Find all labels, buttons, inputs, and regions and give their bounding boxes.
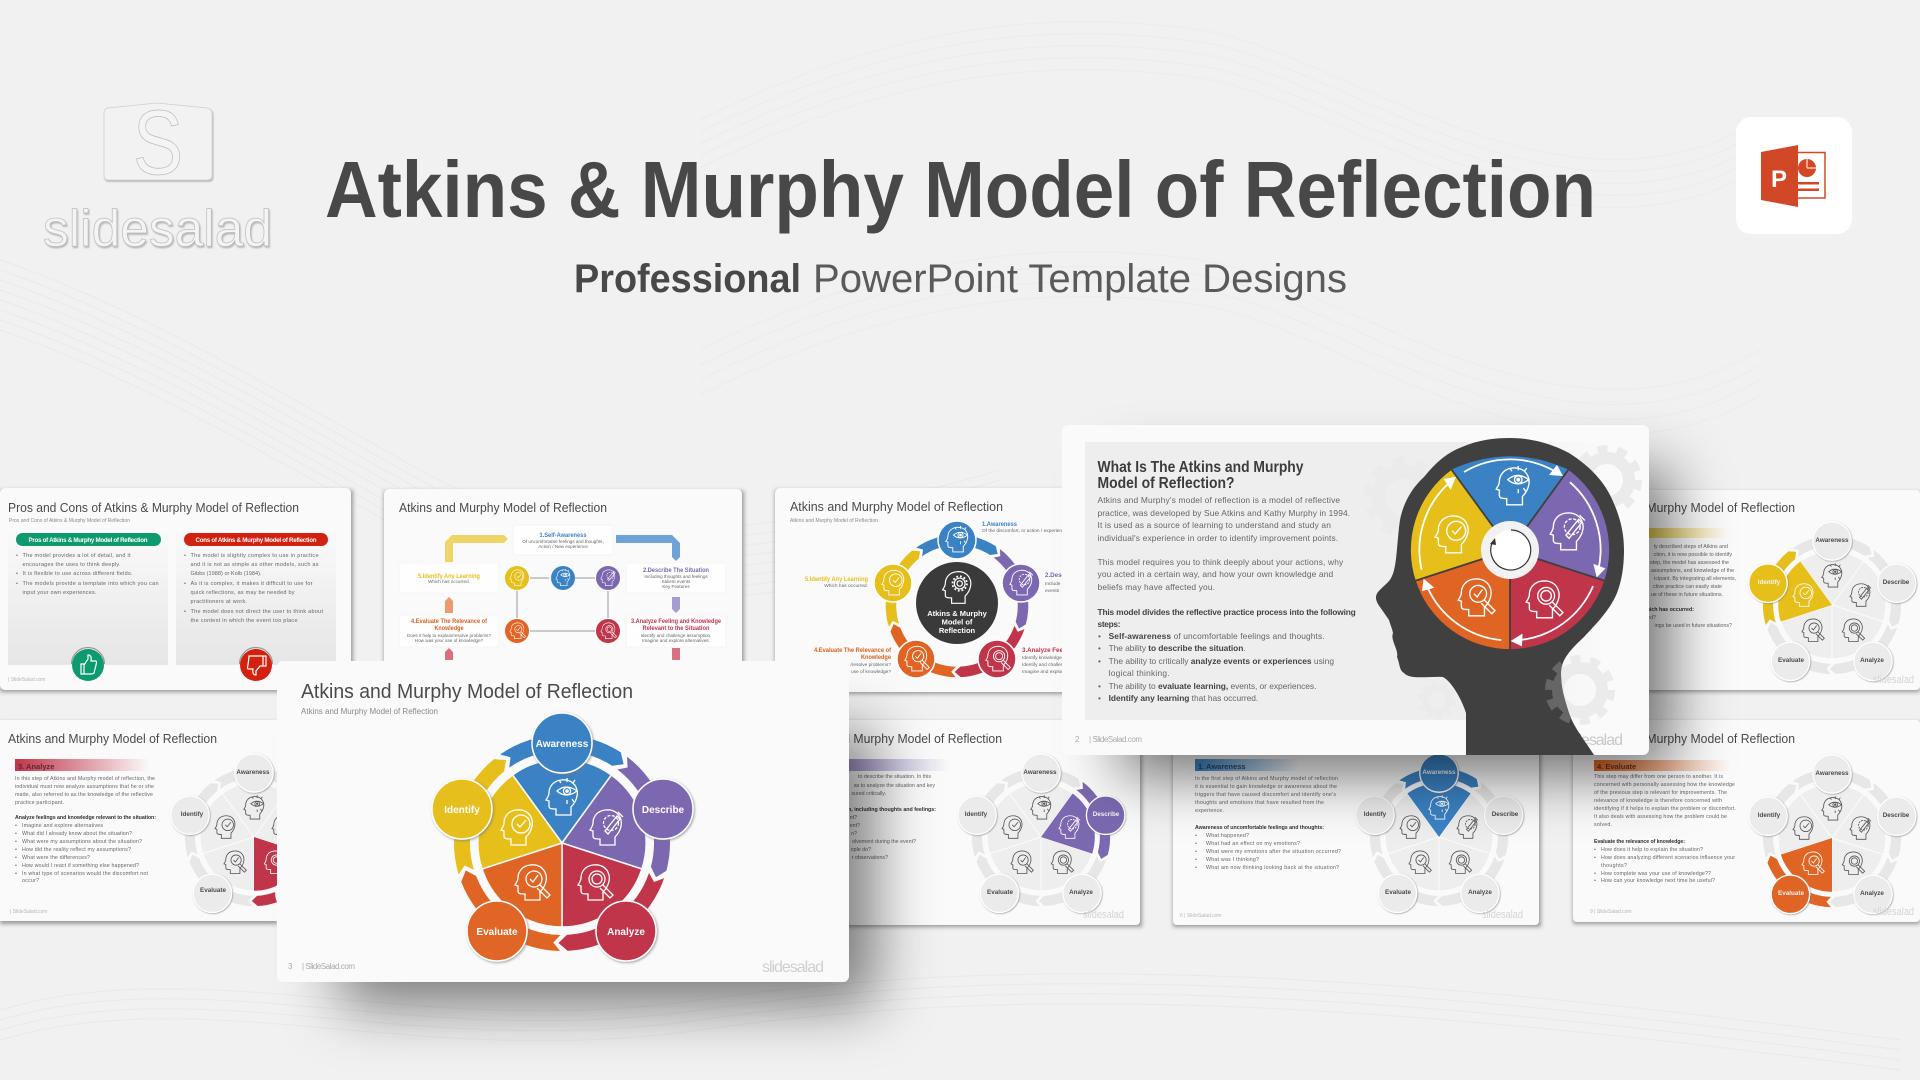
hub xyxy=(1481,521,1539,579)
step text: • xyxy=(1195,833,1197,839)
step text: What were the differences? xyxy=(22,855,90,861)
cons list: quick reflections, as may be needed by xyxy=(190,590,295,596)
step text: ed? xyxy=(1647,615,1656,621)
panel: cons xyxy=(176,528,336,681)
node: describe: Describe xyxy=(642,805,685,816)
intro paragraphs xyxy=(1098,495,1350,592)
node: identify: Identify xyxy=(444,805,480,816)
step text: n? xyxy=(851,831,857,837)
cons list: • xyxy=(184,609,186,615)
step text: ly described steps of Atkins and xyxy=(1654,544,1728,550)
node: evaluate: Evaluate xyxy=(476,927,518,938)
step labels: Identify and challenge xyxy=(1022,662,1069,668)
step heading bar xyxy=(1620,528,1730,538)
panel: pros xyxy=(8,528,168,681)
wedge icons xyxy=(1435,466,1585,618)
step text: to describe the situation. In this xyxy=(858,774,931,780)
step text: individual must now analyze assumptions that he or she xyxy=(15,784,154,790)
intro paragraphs: This model requires you to think deeply about your actions, why xyxy=(1098,557,1344,567)
subtitle: PowerPoint Template Designs xyxy=(813,257,1347,301)
step text: of the previous step is relevant for improvements. The xyxy=(1594,790,1727,796)
steps list: This model divides the reflective practice process into the following xyxy=(1098,607,1356,617)
steps list xyxy=(1098,607,1356,703)
box: evaluate xyxy=(399,615,499,647)
step text: How would I react if something else happened? xyxy=(22,863,139,869)
cons list: the context in which the event too place xyxy=(190,618,298,624)
step text: Analyze feelings and knowledge relevant to the situation: xyxy=(15,815,156,821)
step text: • xyxy=(15,863,17,869)
footer: 2 xyxy=(1075,735,1080,744)
step heading: 1. Awareness xyxy=(1198,762,1246,771)
centre hub: Reflection xyxy=(939,626,976,635)
step text: it is essential to gain knowledge or awareness about the xyxy=(1195,784,1337,790)
steps list: • xyxy=(1098,681,1101,691)
slide subtitle: Atkins and Murphy Model of Reflection xyxy=(790,518,878,524)
node icons xyxy=(874,521,1040,678)
pale wheel with describe highlighted xyxy=(958,754,1125,916)
icon: thumbs down xyxy=(240,648,272,681)
step text: ople do? xyxy=(851,847,871,853)
pale wheel with evaluate highlighted: Describe xyxy=(1883,812,1910,819)
heading: Model of Reflection? xyxy=(1098,475,1234,492)
step text xyxy=(848,774,936,861)
heading: What Is The Atkins and Murphy xyxy=(1098,459,1304,476)
step labels: 4.Evaluate The Relevance of xyxy=(814,647,892,654)
pros list: input your own experiences. xyxy=(22,590,97,596)
step text xyxy=(1641,544,1736,629)
step text xyxy=(1594,774,1736,884)
pale wheel with evaluate highlighted: Identify xyxy=(1758,812,1781,819)
watermark: slidesalad xyxy=(762,959,824,976)
step text: This step may differ from one person to another. It is xyxy=(1594,774,1723,780)
steps list: Identify any learning that has occurred. xyxy=(1109,693,1258,703)
step heading xyxy=(15,759,150,771)
slide: evaluate (bottom right) xyxy=(1573,720,1920,924)
step text: How can your knowledge next time be useful? xyxy=(1601,878,1715,884)
step text: How complete was your use of knowledge?? xyxy=(1601,871,1711,877)
subtitle xyxy=(574,257,1347,301)
slide subtitle: Atkins and Murphy Model of Reflection xyxy=(301,707,438,716)
node icons xyxy=(505,566,620,643)
step text: Awareness of uncomfortable feelings and thoughts: xyxy=(1195,825,1324,831)
step text: r observations? xyxy=(852,855,888,861)
step text: ent? xyxy=(850,823,860,829)
centre hub xyxy=(916,562,998,644)
cons heading xyxy=(184,533,328,546)
cons list: The model does not direct the user to think about xyxy=(190,609,323,615)
step text: How does it help to explain the situation? xyxy=(1601,847,1703,853)
slide: awareness (bottom middle right) xyxy=(1173,700,1541,927)
box: evaluate: Knowledge xyxy=(434,625,464,632)
pale wheel with evaluate highlighted xyxy=(1749,755,1916,917)
box: analyze: Identify and challenge assumption. xyxy=(641,633,711,638)
steps list: The ability to critically analyze events or experiences using xyxy=(1109,656,1334,666)
pros heading: Pros of Atkins & Murphy Model of Reflection xyxy=(28,537,148,544)
step text: occur? xyxy=(22,878,39,884)
step text: • xyxy=(15,823,17,829)
step text: What was I thinking? xyxy=(1206,857,1259,863)
box: self-awareness: Of uncomfortable feelings and thoughts, xyxy=(522,539,604,544)
slide: circular model xyxy=(775,488,1077,694)
step text: How does analyzing different scenarios influence your xyxy=(1601,855,1735,861)
pale wheel with evaluate highlighted: Evaluate xyxy=(1778,890,1804,897)
pros list: • xyxy=(16,553,18,559)
main title: Atkins & Murphy Model of Reflection xyxy=(325,145,1596,234)
steps list: • xyxy=(1098,631,1101,641)
box: describe: Including thoughts and feelings xyxy=(644,574,708,579)
box: identify xyxy=(399,563,499,593)
step labels: 1.Awareness xyxy=(982,521,1018,528)
box: identify: Which has occurred. xyxy=(428,579,470,584)
pale wheel with describe highlighted: Identify xyxy=(965,811,988,818)
watermark: slidesalad xyxy=(1083,909,1124,921)
intro paragraphs: Atkins and Murphy's model of reflection is a model of reflective xyxy=(1098,495,1340,505)
steps list: • xyxy=(1098,643,1101,653)
pale wheel with evaluate highlighted: Analyze xyxy=(1860,890,1884,897)
brain wheel xyxy=(1397,456,1623,665)
background gears xyxy=(1368,449,1638,721)
step labels: /resolve problems? xyxy=(850,662,891,668)
pale wheel with analyze highlighted: Identify xyxy=(181,811,204,818)
slide title: Atkins and Murphy Model of Reflection xyxy=(790,499,1003,514)
ring arrows xyxy=(440,735,684,967)
cons list: Gibbs (1988) or Kolb (1984). xyxy=(190,571,262,577)
step text: In the first step of Atkins and Murphy model of reflection xyxy=(1195,776,1338,782)
footer: | SlideSalad.com xyxy=(8,677,45,683)
slide title: Pros and Cons of Atkins & Murphy Model of Reflection xyxy=(8,500,299,515)
slide title: Atkins and Murphy Model of Reflection xyxy=(1586,500,1795,515)
pros list: • xyxy=(16,581,18,587)
pale wheel with evaluate highlighted: Awareness xyxy=(1815,770,1849,777)
step text: ctive practice can easily state xyxy=(1653,584,1722,590)
pale wheel with analyze highlighted: Evaluate xyxy=(200,887,226,894)
pale wheel with awareness highlighted: Evaluate xyxy=(1385,889,1411,896)
step labels: 3.Analyze Feeling xyxy=(1022,647,1074,654)
intro paragraphs: individual's experience in order to identify improvement points. xyxy=(1098,533,1338,543)
centre hub: Model of xyxy=(942,618,973,626)
box: describe: 2.Describe The Situation xyxy=(643,567,709,574)
steps list: • xyxy=(1098,656,1101,666)
step heading bar xyxy=(800,759,950,771)
step labels: Knowledge xyxy=(861,654,891,661)
box: analyze: Relevant to the Situation xyxy=(642,625,710,632)
centre hub: Atkins & Murphy xyxy=(927,609,988,618)
steps list: Self-awareness of uncomfortable feelings and thoughts. xyxy=(1109,631,1325,641)
logo: slidesalad embossed xyxy=(43,92,272,258)
pale wheel with describe highlighted: Awareness xyxy=(1023,769,1057,776)
slide title: Atkins and Murphy Model of Reflection xyxy=(8,731,217,746)
box: evaluate: 4.Evaluate The Relevance of xyxy=(411,618,488,625)
arrow: yellow xyxy=(445,535,508,562)
watermark: slidesalad xyxy=(1561,732,1623,749)
step text: • xyxy=(1594,871,1596,877)
arrow: blue xyxy=(616,535,680,561)
step text: What happened? xyxy=(1206,833,1249,839)
step text: thoughts and emotions that have resulted from the xyxy=(1195,800,1324,806)
logo: slidesalad embossed: slidesalad xyxy=(43,200,272,258)
pros list: It is flexible to use across different fields. xyxy=(22,571,133,577)
pale wheel with identify highlighted: Awareness xyxy=(1815,537,1849,544)
cons list: • xyxy=(184,581,186,587)
step text: It also deals with assessing how the problem could be xyxy=(1594,814,1727,820)
step text: identifying if it helps to explain the problem or discomfort. xyxy=(1594,806,1736,812)
pale wheel with awareness highlighted: Describe xyxy=(1492,811,1519,818)
slide title: Atkins and Murphy Model of Reflection xyxy=(793,731,1002,746)
slide: describe (bottom middle) xyxy=(780,720,1142,927)
footer: 3 xyxy=(288,962,293,971)
step text: as to analyze the situation and key xyxy=(854,783,935,789)
step text: • xyxy=(1195,841,1197,847)
step text: step, the model has assessed the xyxy=(1650,560,1729,566)
slide title: Atkins and Murphy Model of Reflection xyxy=(301,681,633,703)
slide: flow diagram xyxy=(384,489,744,693)
step text: • xyxy=(1594,847,1596,853)
step text: In this step of Atkins and Murphy model of reflection, the xyxy=(15,776,155,782)
step text: • xyxy=(15,831,17,837)
step text: experience. xyxy=(1195,808,1224,814)
step text: triggers that have caused discomfort and identify one's xyxy=(1195,792,1336,798)
pale wheel with analyze highlighted xyxy=(171,754,338,916)
step text: olvement during the event? xyxy=(852,839,916,845)
box: evaluate: How was your use of knowledge? xyxy=(415,638,484,643)
slide: pros and cons xyxy=(0,488,353,692)
node: analyze: Analyze xyxy=(607,927,645,938)
pale wheel with awareness highlighted: Awareness xyxy=(1422,769,1456,776)
step text: thoughts? xyxy=(1601,863,1627,869)
node: awareness xyxy=(532,713,592,773)
step text: assumptions, and knowledge of the xyxy=(1651,568,1734,574)
step text: • xyxy=(1195,865,1197,871)
pros list: The model provides a lot of detail, and it xyxy=(22,553,131,559)
cons heading: Cons of Atkins & Murphy Model of Reflection xyxy=(196,537,317,544)
pale wheel with identify highlighted: Identify xyxy=(1758,579,1781,586)
cons list: As it is complex, it makes it difficult to use for xyxy=(190,581,313,587)
pale wheel with awareness highlighted xyxy=(1356,754,1523,916)
step text xyxy=(15,776,156,884)
step text xyxy=(1195,776,1341,871)
step text: What did I already know about the situation? xyxy=(22,831,132,837)
step text: which has occurred: xyxy=(1641,607,1694,613)
pros list xyxy=(16,553,159,596)
box: describe: Salient events xyxy=(662,579,691,584)
step text: made, also referred to as the knowledge of the reflective xyxy=(15,792,153,798)
step heading xyxy=(1594,760,1730,771)
step heading xyxy=(1195,759,1300,771)
box: identify: 5.Identify Any Learning xyxy=(418,573,480,580)
pale wheel with identify highlighted xyxy=(1749,522,1916,684)
slide: what is the model (hero) xyxy=(1062,425,1649,755)
pale wheel with identify highlighted: Analyze xyxy=(1860,657,1884,664)
node: analyze xyxy=(596,901,656,961)
step heading: 4. Evaluate xyxy=(1597,762,1636,771)
box: self-awareness xyxy=(513,525,613,555)
pale wheel with identify highlighted: Evaluate xyxy=(1778,657,1804,664)
pie wedges xyxy=(467,759,657,940)
pros list: The models provide a template into which you can xyxy=(22,581,159,587)
step text: ction, it is now possible to identify xyxy=(1654,552,1732,558)
step text: What had an effect on my emotions? xyxy=(1206,841,1300,847)
step text: Imagine and explore alternatives xyxy=(22,823,103,829)
step text: How did the reality reflect my assumptions? xyxy=(22,847,131,853)
logo: slidesalad embossed: S xyxy=(133,92,183,194)
gear on neck xyxy=(1545,662,1571,724)
head silhouette xyxy=(1376,438,1624,755)
icon: PowerPoint xyxy=(1736,117,1852,234)
pros list: encourages the uses to think deeply. xyxy=(22,562,121,568)
step text: • xyxy=(15,871,17,877)
watermark: slidesalad xyxy=(1482,909,1523,921)
node: evaluate xyxy=(467,901,527,961)
step labels: Imagine and explore xyxy=(1022,669,1066,675)
pale wheel with describe highlighted: Analyze xyxy=(1069,889,1093,896)
slide: main wheel (centre) xyxy=(277,661,849,982)
box: analyze: Imagine and explore alternatives. xyxy=(642,638,710,643)
pale wheel with awareness highlighted: Analyze xyxy=(1468,889,1492,896)
step text: What am now thinking looking back at the situation? xyxy=(1206,865,1339,871)
steps list: The ability to evaluate learning, events, or experiences. xyxy=(1109,681,1316,691)
slide: analyze (bottom left) xyxy=(0,720,338,924)
wedge icons xyxy=(501,778,623,900)
intro paragraphs: It is used as a source of learning to understand and study an xyxy=(1098,520,1331,530)
step labels: 5.Identify Any Learning xyxy=(805,576,868,583)
steps list: • xyxy=(1098,693,1101,703)
step text: ue of these in future situations. xyxy=(1651,592,1723,598)
pale wheel with analyze highlighted: Awareness xyxy=(236,769,270,776)
cons list: • xyxy=(184,553,186,559)
step text: icipant. By integrating all elements, xyxy=(1654,576,1736,582)
step labels: events xyxy=(1045,588,1060,594)
pale wheel with awareness highlighted: Identify xyxy=(1364,811,1387,818)
wedge arrows xyxy=(1410,459,1613,654)
step text: sured critically. xyxy=(851,791,886,797)
step text: • xyxy=(15,847,17,853)
small connector arrows xyxy=(445,578,680,660)
box: self-awareness: Action / New experience xyxy=(538,544,588,549)
footer: | SlideSalad.com xyxy=(302,962,355,971)
footer: 6 | SlideSalad.com xyxy=(1180,913,1222,919)
shadows of foreground slides xyxy=(340,470,1670,1005)
slide title: Atkins and Murphy Model of Reflection xyxy=(399,500,607,515)
footer: 9 | SlideSalad.com xyxy=(1590,909,1632,915)
step text: concerned with personally assessing how the knowledge xyxy=(1594,782,1735,788)
step labels: Include xyxy=(1045,581,1061,587)
pros list: • xyxy=(16,571,18,577)
icon: PowerPoint: P xyxy=(1771,166,1787,193)
step labels: 2.Describe xyxy=(1045,572,1077,579)
footer: | SlideSalad.com xyxy=(10,909,47,915)
step text: practice participant. xyxy=(15,800,64,806)
step heading: 3. Analyze xyxy=(18,762,54,771)
box: describe: Key Features xyxy=(662,584,690,589)
step text: solved. xyxy=(1594,822,1612,828)
step text: • xyxy=(1594,878,1596,884)
box: analyze xyxy=(626,615,726,647)
step labels: Of the discomfort, or action / experience xyxy=(982,528,1067,534)
pale wheel with describe highlighted: Describe xyxy=(1093,811,1120,818)
step text: nt? xyxy=(850,815,857,821)
step text: relevance of knowledge is therefore concerned with xyxy=(1594,798,1722,804)
pale wheel with identify highlighted: Describe xyxy=(1883,579,1910,586)
step text: What were my emotions after the situation occurred? xyxy=(1206,849,1341,855)
step text: What were my assumptions about the situation? xyxy=(22,839,142,845)
node: describe xyxy=(633,779,693,839)
box: analyze: 3.Analyze Feeling and Knowledge xyxy=(631,618,721,625)
intro paragraphs: practice, was developed by Sue Atkins and Kathy Murphy in 1994. xyxy=(1098,508,1350,518)
slide subtitle: Pros and Cons of Atkins & Murphy Model of Reflection xyxy=(9,518,130,524)
steps list: logical thinking. xyxy=(1109,668,1170,678)
subtitle: Professional xyxy=(574,257,801,301)
step text: • xyxy=(1195,849,1197,855)
box: evaluate: Does it help to explain/resolve problems? xyxy=(407,633,491,638)
box: self-awareness: 1.Self-Awareness xyxy=(540,532,587,539)
grey text panel xyxy=(1085,442,1605,720)
step labels xyxy=(805,521,1077,675)
cons list: The model is slightly complex to use in practice xyxy=(190,553,318,559)
step text: In what type of scenarios would the discomfort not xyxy=(22,871,149,877)
step labels: Which has occurred. xyxy=(824,583,868,589)
icon: thumbs up xyxy=(72,648,104,681)
step labels: Identify knowledge xyxy=(1022,655,1062,661)
step labels: use of knowledge? xyxy=(851,669,891,675)
step text: • xyxy=(1195,857,1197,863)
step text: • xyxy=(1594,855,1596,861)
box: describe xyxy=(626,563,726,593)
step text: n, including thoughts and feelings: xyxy=(848,807,936,813)
pros heading xyxy=(16,533,161,546)
slide: identify (top right) xyxy=(1586,490,1920,692)
ring arrows xyxy=(877,535,1037,688)
step text: • xyxy=(15,839,17,845)
node: identify xyxy=(432,779,492,839)
slide title: Atkins and Murphy Model of Reflection xyxy=(1586,731,1795,746)
node: awareness: Awareness xyxy=(536,739,589,750)
steps list: The ability to describe the situation. xyxy=(1109,643,1246,653)
step text: ings be used in future situations? xyxy=(1655,623,1732,629)
cons list: practitioners at work. xyxy=(190,599,247,605)
cons list xyxy=(184,553,323,624)
heading xyxy=(1098,459,1304,492)
intro paragraphs: you acted in a certain way, and how your own knowledge and xyxy=(1098,569,1334,579)
pale wheel with describe highlighted: Evaluate xyxy=(987,889,1013,896)
step text: Evaluate the relevance of knowledge: xyxy=(1594,839,1685,845)
step text: • xyxy=(15,855,17,861)
intro paragraphs: beliefs may have affected you. xyxy=(1098,582,1215,592)
cons list: and it is not as simple as other models, such as xyxy=(190,562,319,568)
footer: | SlideSalad.com xyxy=(1089,735,1142,744)
steps list: steps: xyxy=(1098,619,1120,629)
